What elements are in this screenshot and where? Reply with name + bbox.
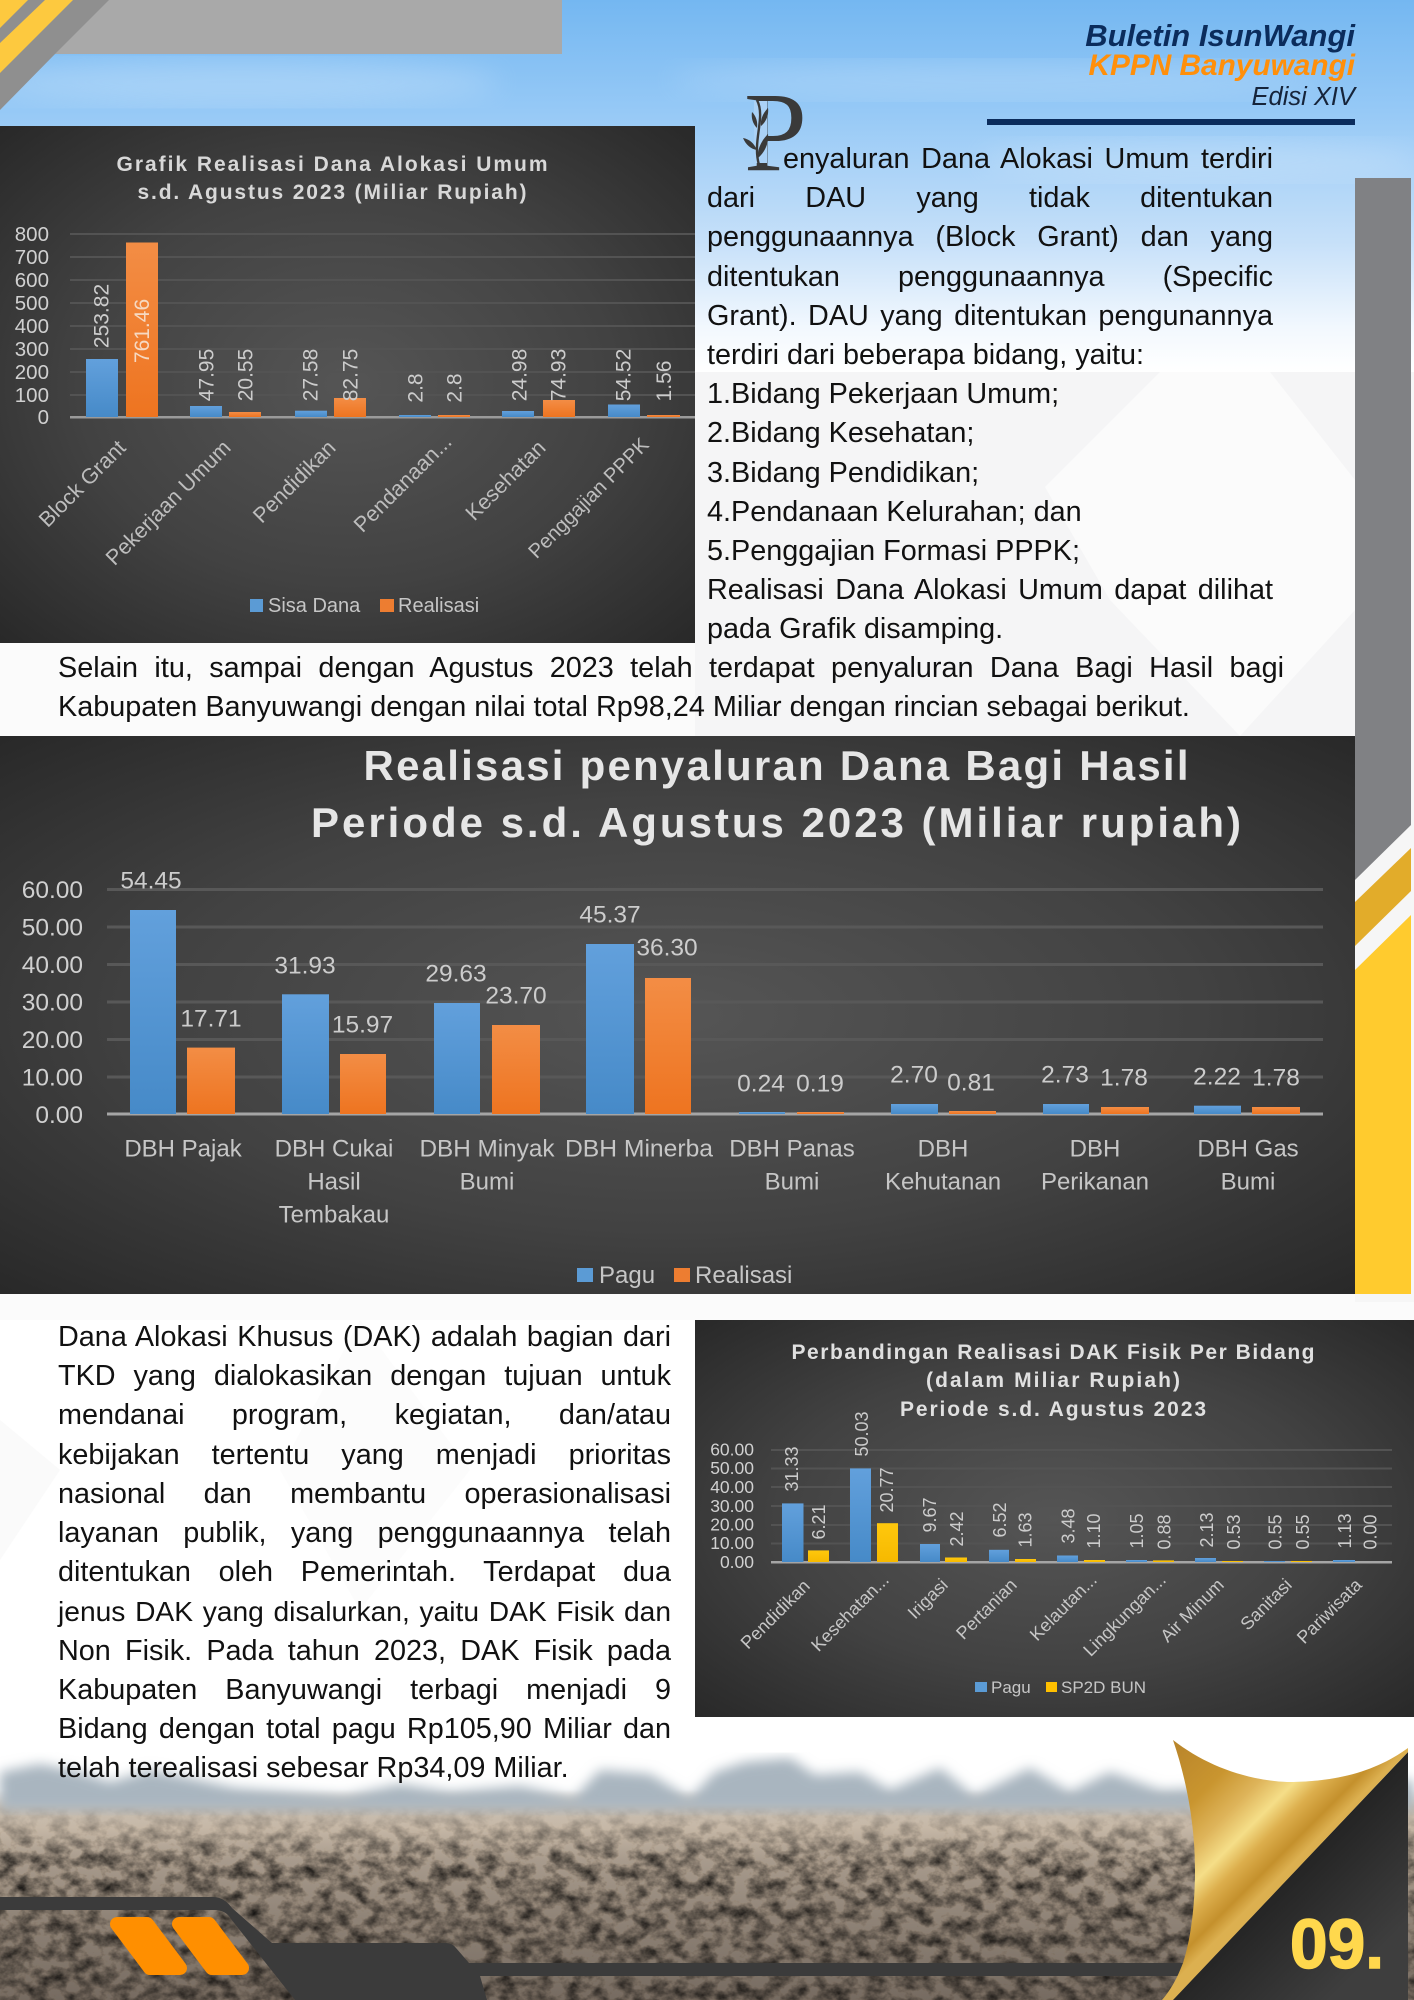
data labels: 82.75 xyxy=(340,349,362,401)
data labels: 15.97 xyxy=(332,1012,393,1038)
text: Kabupaten Banyuwangi dengan nilai total Rp98,24 Miliar dengan rincian sebagai berikut. xyxy=(58,691,1190,723)
data labels: 2.42 xyxy=(947,1511,967,1547)
data labels: 31.93 xyxy=(274,952,336,980)
data labels: 0.53 xyxy=(1224,1514,1244,1550)
category labels: Tembakau xyxy=(279,1202,389,1228)
category labels: Pariwisata xyxy=(1293,1574,1367,1648)
legend: SP2D BUN xyxy=(1061,1678,1146,1697)
category labels: Pendanaan... xyxy=(349,430,457,537)
category labels: DBH Gas xyxy=(1197,1136,1299,1162)
category labels: Irigasi xyxy=(904,1575,952,1623)
gridlines and y axis xyxy=(15,223,695,429)
data labels: 6.21 xyxy=(809,1504,829,1540)
gridlines and y axis: 400 xyxy=(15,315,49,338)
legend xyxy=(577,1262,792,1289)
text: 5.Penggajian Formasi PPPK; xyxy=(707,535,1080,567)
data labels: 20.77 xyxy=(877,1467,897,1513)
text: dari DAU yang tidak ditentukan xyxy=(707,182,1273,214)
data labels: 761.46 xyxy=(131,299,154,363)
data labels: 6.52 xyxy=(990,1502,1010,1538)
gridlines and y axis: 0.00 xyxy=(720,1552,754,1572)
data labels: 9.67 xyxy=(920,1497,940,1533)
data labels: 0.88 xyxy=(1154,1514,1174,1550)
gridlines and y axis: 50.00 xyxy=(710,1458,754,1478)
gridlines and y axis: 20.00 xyxy=(22,1027,83,1054)
category labels xyxy=(34,430,654,570)
legend: Sisa Dana xyxy=(268,595,361,617)
category labels: Hasil xyxy=(307,1168,361,1196)
text: terdiri dari beberapa bidang, yaitu: xyxy=(707,339,1144,371)
category labels: Perikanan xyxy=(1041,1168,1149,1196)
data labels: 2.8 xyxy=(404,373,428,403)
category labels: DBH Minerba xyxy=(565,1136,714,1162)
chart title: Periode s.d. Agustus 2023 xyxy=(900,1398,1206,1421)
data labels: 47.95 xyxy=(196,349,218,401)
gridlines and y axis: 40.00 xyxy=(22,952,83,979)
gridlines and y axis: 500 xyxy=(15,292,49,315)
gridlines and y axis: 200 xyxy=(15,361,49,384)
data labels: 54.52 xyxy=(612,349,636,401)
category labels: DBH Panas xyxy=(729,1136,855,1162)
category labels: Pekerjaan Umum xyxy=(101,436,236,570)
data labels xyxy=(120,868,1300,1098)
data labels: 2.73 xyxy=(1041,1062,1089,1088)
data labels: 29.63 xyxy=(425,960,487,988)
category labels xyxy=(124,1136,1299,1228)
data labels: 0.81 xyxy=(947,1070,995,1096)
bars: Pagu and Realisasi xyxy=(130,910,1300,1114)
text: Edisi XIV xyxy=(1252,83,1355,111)
text: 4.Pendanaan Kelurahan; dan xyxy=(707,496,1082,528)
data labels: 2.8 xyxy=(444,373,466,403)
data labels: 3.48 xyxy=(1059,1508,1079,1544)
data labels: 36.30 xyxy=(636,934,698,962)
category labels: Block Grant xyxy=(34,436,131,532)
text: telah terealisasi sebesar Rp34,09 Miliar. xyxy=(58,1752,569,1784)
data labels: 0.00 xyxy=(1361,1514,1381,1550)
gridlines and y axis: 30.00 xyxy=(22,990,83,1016)
category labels: Pertanian xyxy=(952,1575,1021,1643)
category labels: Sanitasi xyxy=(1236,1575,1296,1634)
text: pada Grafik disamping. xyxy=(707,613,1003,645)
data labels: 45.37 xyxy=(579,902,641,928)
text: KPPN Banyuwangi xyxy=(1088,49,1355,82)
data labels: 27.58 xyxy=(300,349,322,401)
chart title xyxy=(792,1341,1314,1421)
category labels: DBH Minyak xyxy=(420,1136,556,1162)
gridlines and y axis: 100 xyxy=(15,384,49,407)
category labels: Bumi xyxy=(1221,1168,1275,1196)
data labels: 2.70 xyxy=(890,1062,938,1088)
text: Dana Alokasi Khusus (DAK) adalah bagian dari xyxy=(58,1321,671,1353)
chart title: Grafik Realisasi Dana Alokasi Umum xyxy=(116,153,548,176)
data labels: 17.71 xyxy=(180,1006,242,1032)
gridlines and y axis: 0 xyxy=(38,406,49,429)
text: Realisasi Dana Alokasi Umum dapat dilihat xyxy=(707,574,1273,606)
category labels: Pendidikan xyxy=(248,436,341,528)
text: Kabupaten Banyuwangi terbagi menjadi 9 xyxy=(58,1674,671,1706)
bars: Sisa Dana and Realisasi xyxy=(86,242,680,417)
data labels: 253.82 xyxy=(90,284,114,348)
text: TKD yang dialokasikan dengan tujuan untuk xyxy=(58,1360,671,1392)
category labels: Pendidikan xyxy=(737,1576,814,1653)
data labels: 0.19 xyxy=(796,1070,844,1098)
data labels: 1.05 xyxy=(1127,1513,1147,1549)
data labels xyxy=(782,1411,1381,1550)
legend xyxy=(975,1678,1146,1697)
gridlines and y axis: 10.00 xyxy=(22,1064,83,1092)
data labels: 50.03 xyxy=(852,1411,872,1457)
category labels: Kelautan... xyxy=(1026,1570,1101,1645)
data labels: 1.13 xyxy=(1335,1513,1355,1549)
chart title: Realisasi penyaluran Dana Bagi Hasil xyxy=(364,742,1188,789)
legend: Realisasi xyxy=(695,1262,792,1289)
data labels: 1.78 xyxy=(1100,1064,1148,1092)
data labels xyxy=(90,284,676,403)
data labels: 1.63 xyxy=(1016,1512,1036,1548)
text: mendanai program, kegiatan, dan/atau xyxy=(58,1399,671,1431)
category labels: Kesehatan xyxy=(461,436,551,525)
text: Selain itu, sampai dengan Agustus 2023 telah terdapat penyaluran Dana Bagi Hasil bagi xyxy=(58,652,1284,684)
legend: Realisasi xyxy=(398,595,479,617)
category labels: Lingkungan... xyxy=(1079,1570,1170,1660)
gridlines and y axis: 60.00 xyxy=(22,877,83,904)
chart title: Periode s.d. Agustus 2023 (Miliar rupiah) xyxy=(311,799,1241,846)
data labels: 31.33 xyxy=(782,1446,802,1492)
category labels: Air Minum xyxy=(1156,1575,1228,1646)
data labels: 1.78 xyxy=(1252,1064,1300,1092)
chart title xyxy=(116,153,548,204)
text: 1.Bidang Pekerjaan Umum; xyxy=(707,378,1059,410)
text: ditentukan oleh Pemerintah. Terdapat dua xyxy=(58,1556,671,1588)
text: jenus DAK yang disalurkan, yaitu DAK Fisik dan xyxy=(58,1595,671,1627)
category labels: DBH Pajak xyxy=(124,1136,243,1162)
chart title: Perbandingan Realisasi DAK Fisik Per Bidang xyxy=(792,1341,1314,1364)
data labels: 1.56 xyxy=(653,361,676,401)
data labels: 1.10 xyxy=(1084,1513,1104,1549)
data labels: 0.55 xyxy=(1266,1514,1286,1550)
masthead: bulletin name and edition xyxy=(987,18,1357,125)
gridlines and y axis: 10.00 xyxy=(710,1533,754,1553)
page number: 09. xyxy=(1290,1905,1384,1983)
legend: Pagu xyxy=(991,1678,1031,1697)
text: Grant). DAU yang ditentukan pengunannya xyxy=(707,300,1273,332)
text block: Dana Alokasi Khusus explanation xyxy=(57,1321,671,1784)
data labels: 20.55 xyxy=(234,349,258,401)
text: 3.Bidang Pendidikan; xyxy=(707,457,979,489)
text: Bidang dengan total pagu Rp105,90 Miliar dan xyxy=(58,1713,671,1745)
text: Buletin IsunWangi xyxy=(1085,18,1355,53)
legend xyxy=(250,595,479,617)
data labels: 74.93 xyxy=(548,349,570,401)
gridlines and y axis: 60.00 xyxy=(710,1440,754,1460)
chart title: s.d. Agustus 2023 (Miliar Rupiah) xyxy=(138,181,526,204)
text: nasional dan membantu operasionalisasi xyxy=(58,1478,671,1510)
data labels: 2.13 xyxy=(1197,1512,1217,1548)
data labels: 24.98 xyxy=(508,349,532,401)
gridlines and y axis: 800 xyxy=(15,223,49,246)
category labels: Bumi xyxy=(460,1168,514,1196)
text: kebijakan tertentu yang menjadi prioritas xyxy=(58,1439,671,1471)
text block: Dana Bagi Hasil introduction xyxy=(58,652,1284,723)
category labels xyxy=(737,1570,1367,1660)
data labels: 54.45 xyxy=(120,868,182,894)
chart title xyxy=(311,742,1241,846)
data labels: 0.55 xyxy=(1293,1514,1313,1550)
data labels: 2.22 xyxy=(1193,1064,1241,1090)
category labels: DBH xyxy=(918,1136,968,1162)
icon: ornamental drop cap P with vine: P xyxy=(744,70,807,195)
gridlines and y axis: 700 xyxy=(15,246,49,269)
text: enyaluran Dana Alokasi Umum terdiri xyxy=(783,143,1273,175)
text: Non Fisik. Pada tahun 2023, DAK Fisik pada xyxy=(58,1635,671,1667)
gridlines and y axis: 20.00 xyxy=(710,1514,754,1534)
gridlines and y axis: 0.00 xyxy=(35,1102,83,1129)
gridlines and y axis: 600 xyxy=(15,269,49,292)
data labels: 23.70 xyxy=(485,982,547,1010)
category labels: DBH xyxy=(1070,1136,1120,1162)
category labels: Penggajian PPPK xyxy=(524,434,654,563)
text: 2.Bidang Kesehatan; xyxy=(707,417,974,449)
category labels: Kesehatan... xyxy=(807,1570,893,1655)
legend: Pagu xyxy=(599,1262,655,1289)
data labels: 0.24 xyxy=(737,1070,785,1098)
gridlines and y axis: 50.00 xyxy=(22,914,83,942)
chart title: (dalam Miliar Rupiah) xyxy=(926,1369,1180,1392)
gridlines and y axis xyxy=(710,1440,1392,1572)
text block: Dana Alokasi Umum introduction xyxy=(707,143,1273,645)
gridlines and y axis: 30.00 xyxy=(710,1496,754,1516)
gridlines and y axis: 300 xyxy=(15,338,49,361)
bars: Pagu and SP2D BUN xyxy=(782,1468,1355,1562)
category labels: Kehutanan xyxy=(885,1168,1001,1196)
category labels: DBH Cukai xyxy=(275,1136,393,1162)
text: ditentukan penggunaannya (Specific xyxy=(707,261,1273,293)
gridlines and y axis xyxy=(22,877,1323,1129)
text: penggunaannya (Block Grant) dan yang xyxy=(707,221,1273,253)
gridlines and y axis: 40.00 xyxy=(710,1477,754,1497)
category labels: Bumi xyxy=(765,1168,819,1196)
text: layanan publik, yang penggunaannya telah xyxy=(58,1517,671,1549)
